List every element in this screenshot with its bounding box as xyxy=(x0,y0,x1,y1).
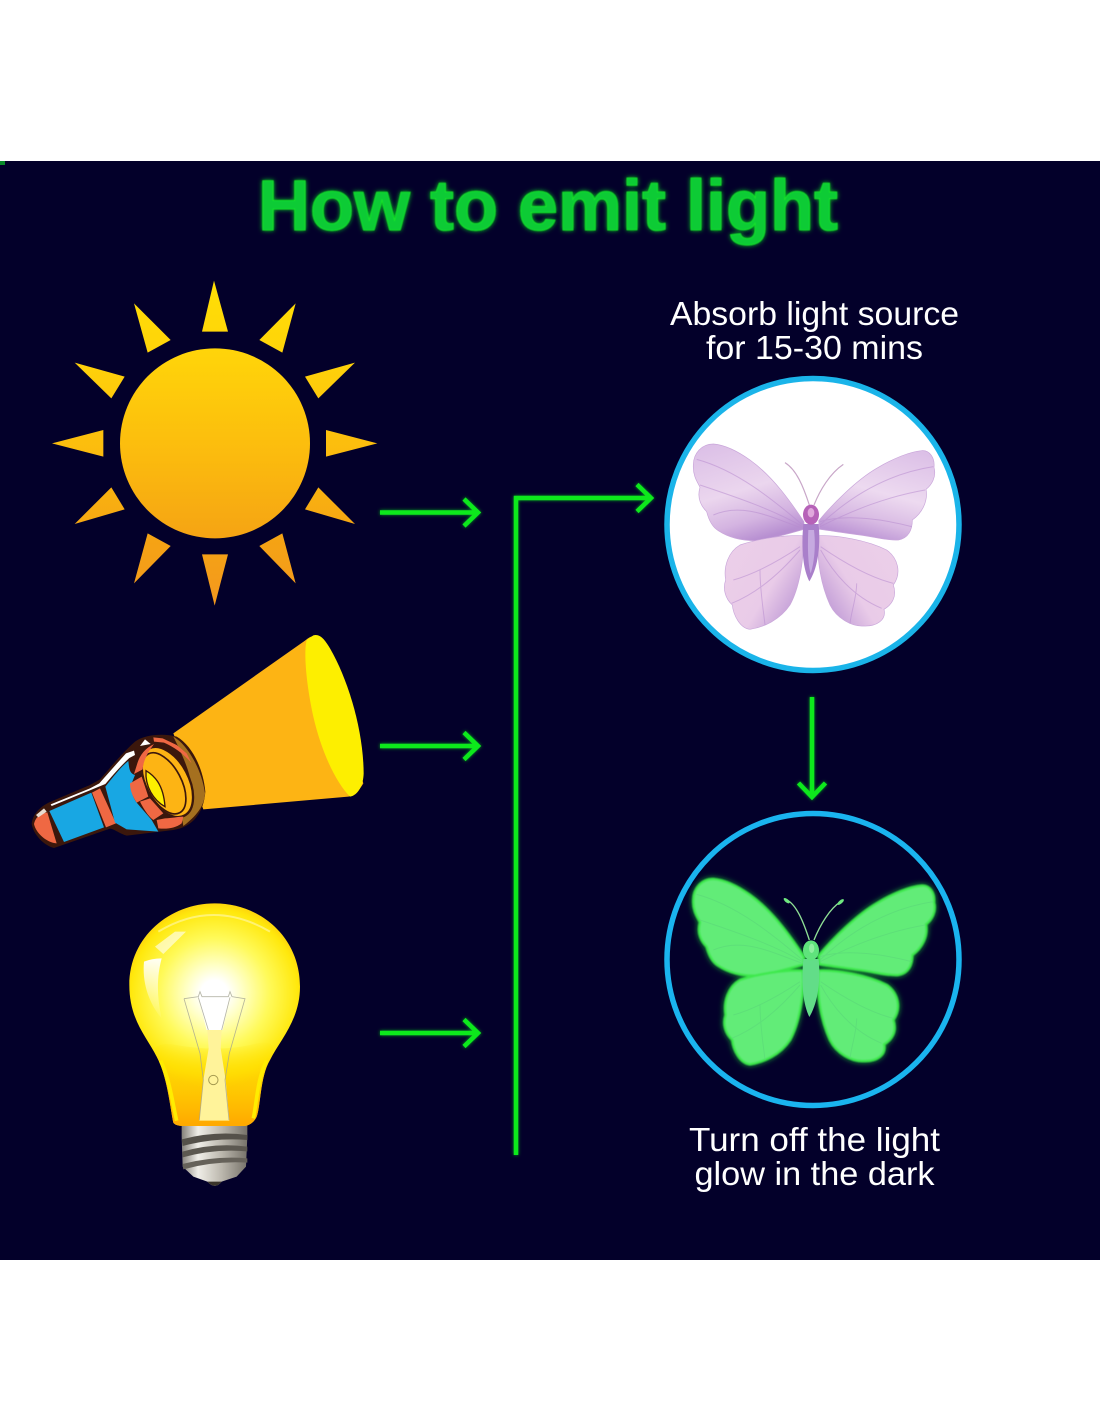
icon: flashlight xyxy=(32,635,364,848)
arrow: sun to line xyxy=(380,499,478,526)
panel: glowing butterfly circle xyxy=(667,814,959,1106)
arrow: vertical collector line to butterfly xyxy=(516,484,651,1155)
arrow: down to glowing butterfly xyxy=(798,697,826,797)
text: duration: for 15-30 mins xyxy=(706,329,923,366)
arrow: flashlight to line xyxy=(380,732,478,760)
icon: sun xyxy=(52,281,377,606)
title: How to emit light xyxy=(258,167,838,246)
panel: charging butterfly circle xyxy=(667,378,959,670)
arrow: bulb to line xyxy=(380,1020,478,1046)
panel: dark navy background xyxy=(0,161,1100,1260)
icon: lilac butterfly xyxy=(693,444,935,629)
text: turn off the light: Turn off the light xyxy=(689,1121,940,1158)
icon: light bulb xyxy=(129,903,300,1186)
text: absorb light source: Absorb light source xyxy=(670,295,959,332)
text: glow in the dark: glow in the dark xyxy=(694,1155,935,1192)
bulb screw base xyxy=(182,1123,247,1186)
icon: glowing green butterfly xyxy=(693,879,935,1064)
